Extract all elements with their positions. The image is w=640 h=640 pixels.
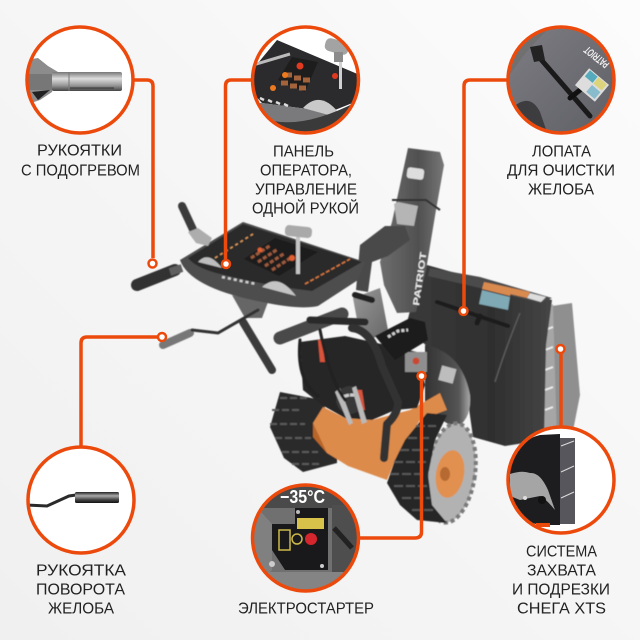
label: operator panel: УПРАВЛЕНИЕ — [255, 182, 357, 198]
label: crank handle: РУКОЯТКА — [36, 562, 126, 580]
chute rotation crank — [163, 310, 258, 345]
connector: electric starter — [359, 380, 422, 538]
callout circle: scoop: PATRIOT — [582, 43, 612, 70]
label: operator panel: ОПЕРАТОРА, — [260, 162, 352, 180]
chute rotator — [356, 226, 410, 292]
heated handle — [137, 268, 182, 285]
engine cowl details — [318, 340, 457, 425]
callout circle: panel — [250, 27, 360, 135]
marker: chute scoop — [460, 307, 468, 315]
label: chute scoop: ДЛЯ ОЧИСТКИ — [507, 162, 615, 180]
label: XTS system: ЗАХВАТА — [527, 562, 596, 580]
label: operator panel — [252, 144, 359, 218]
label: electric starter: ЭЛЕКТРОСТАРТЕР — [238, 600, 374, 618]
marker: electric starter — [418, 372, 426, 380]
wheel housing arc — [425, 345, 470, 428]
label: heated handles: С ПОДОГРЕВОМ — [21, 162, 140, 180]
left lever — [182, 206, 212, 246]
marker: XTS system — [556, 345, 564, 353]
label: operator panel: ПАНЕЛЬ — [273, 144, 334, 160]
deflector plate — [353, 288, 388, 340]
callout circle: starter: −35°C — [280, 487, 325, 507]
connector: heated handles — [134, 80, 153, 258]
label: operator panel: ОДНОЙ РУКОЙ — [252, 198, 359, 218]
marker: chute crank — [158, 333, 166, 341]
connector: chute scoop — [464, 80, 507, 306]
chute cleaning scoop on housing — [437, 302, 508, 326]
label: heated handles: РУКОЯТКИ — [37, 142, 122, 160]
chute brand text: PATRIOT — [411, 251, 429, 306]
orange auger body — [313, 393, 447, 480]
connector: chute crank — [81, 337, 158, 447]
label: crank handle: ЖЕЛОБА — [48, 600, 114, 618]
label: heated handles — [21, 142, 140, 180]
side plate: XTS cutter — [541, 303, 580, 446]
chute window — [392, 167, 440, 226]
callout circle: XTS — [506, 427, 614, 533]
callout circle: scoop — [500, 27, 614, 135]
marker: operator panel — [222, 260, 230, 268]
orange hub — [432, 448, 468, 500]
front right tire — [387, 413, 482, 526]
marker: heated handles — [148, 260, 156, 268]
label: XTS system: СИСТЕМА — [526, 544, 597, 560]
operator panel — [180, 222, 365, 307]
orange shade — [313, 423, 327, 453]
label: chute scoop: ЛОПАТА — [532, 144, 591, 160]
callout circle: starter — [250, 484, 362, 592]
housing top label — [428, 268, 552, 382]
label: chute scoop — [507, 144, 615, 198]
frame tubes — [243, 295, 398, 458]
rear left tire — [270, 392, 337, 472]
label: chute scoop: ЖЕЛОБА — [528, 182, 594, 198]
callout circle: crank handle — [27, 447, 134, 553]
auger housing — [405, 265, 552, 446]
label: XTS system: СНЕГА XTS — [517, 600, 606, 618]
panel base support — [232, 295, 268, 318]
discharge chute — [380, 148, 444, 313]
label: XTS system — [512, 544, 610, 618]
snow blower machine — [137, 148, 580, 526]
connector: XTS system — [559, 353, 563, 427]
label: XTS system: И ПОДРЕЗКИ — [512, 582, 610, 598]
control box with snow icon — [375, 318, 428, 360]
T-handle gear lever — [284, 225, 312, 274]
connector: operator panel — [226, 80, 252, 259]
engine — [300, 336, 425, 420]
label: crank handle: ПОВОРОТА — [36, 582, 125, 598]
label: crank handle — [36, 562, 126, 618]
callout circle: heated grip — [26, 27, 133, 133]
